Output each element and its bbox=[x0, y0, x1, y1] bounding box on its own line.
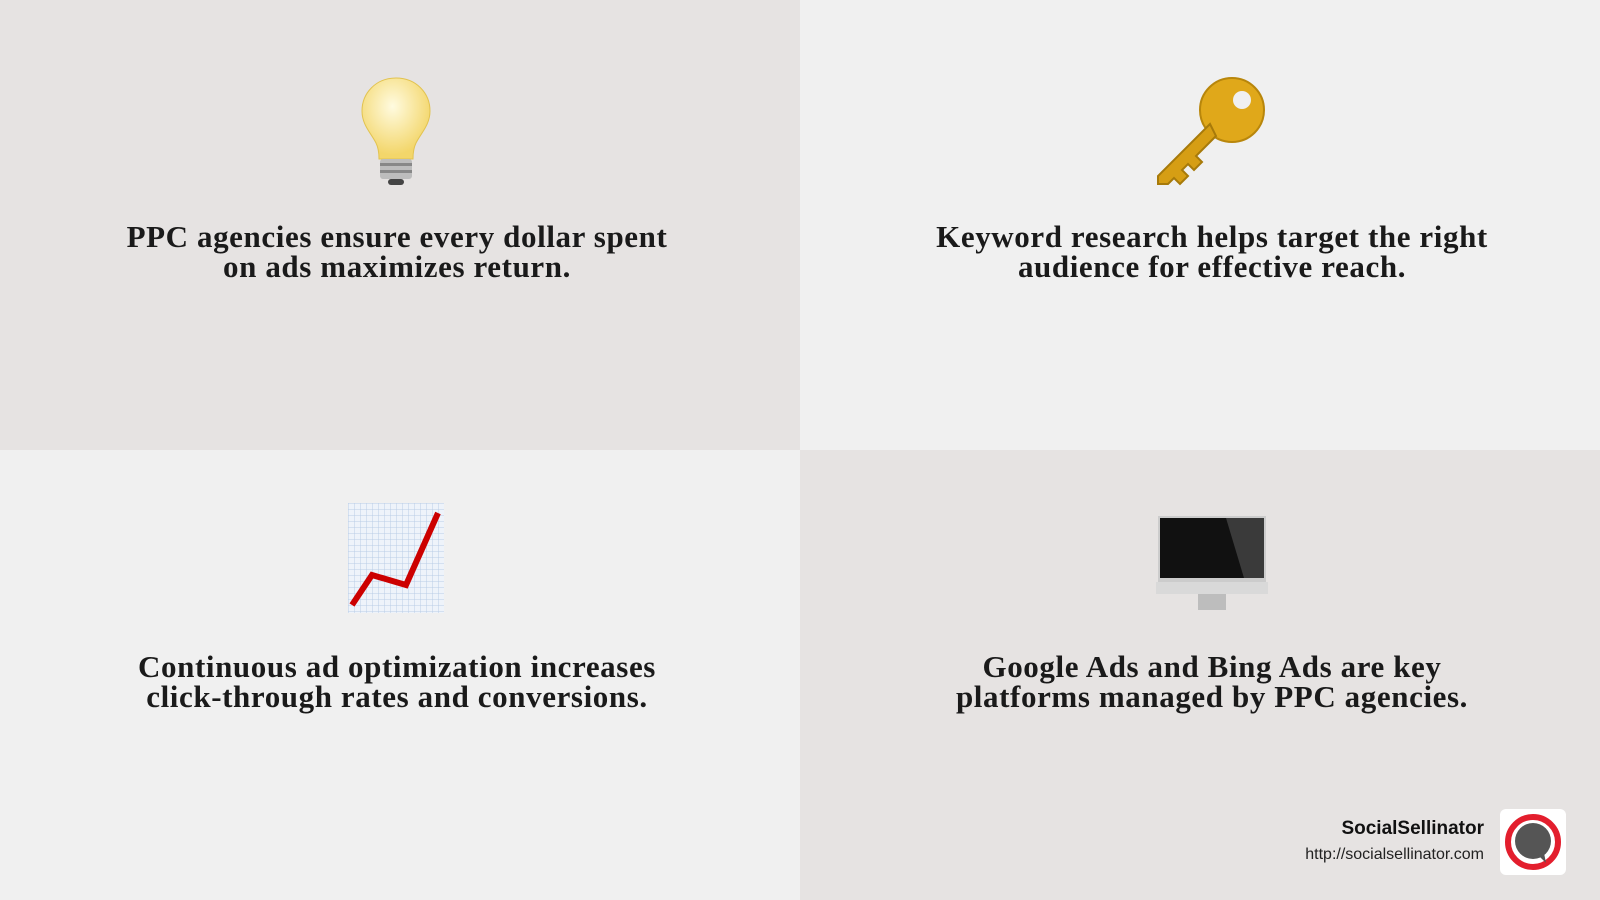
icon: chart bbox=[348, 503, 444, 613]
text: Google Ads bbox=[956, 649, 1468, 714]
text: PPC agencies bbox=[127, 219, 667, 284]
panel: top-right bbox=[800, 0, 1600, 450]
icon: logo bbox=[1500, 809, 1566, 875]
icon: key bbox=[1157, 77, 1265, 186]
brand name: SocialSellinator bbox=[1341, 818, 1484, 839]
text: Keyword research: Keyword research helps target the right bbox=[936, 219, 1488, 254]
panel: bottom-left bbox=[0, 450, 800, 900]
text: Continuous optimization bbox=[138, 649, 656, 714]
text: PPC agencies: PPC agencies ensure every dollar spent bbox=[127, 219, 667, 254]
text: PPC agencies: on ads maximizes return. bbox=[223, 249, 571, 284]
panel: bottom-right bbox=[800, 450, 1600, 900]
brand: SocialSellinator bbox=[1305, 809, 1566, 875]
text: Google Ads: platforms managed by PPC agencies. bbox=[956, 679, 1468, 714]
url: http://socialsellinator.com bbox=[1305, 846, 1484, 863]
panel: top-left bbox=[0, 0, 800, 450]
icon: monitor bbox=[1156, 516, 1268, 610]
text: Keyword research: audience for effective reach. bbox=[1018, 249, 1406, 284]
text: Continuous optimization: click-through rates and conversions. bbox=[146, 679, 648, 714]
text: Keyword research bbox=[936, 219, 1488, 284]
text: Google Ads: Google Ads and Bing Ads are key bbox=[982, 649, 1442, 684]
icon: light bulb bbox=[362, 78, 430, 185]
text: Continuous optimization: Continuous ad optimization increases bbox=[138, 649, 656, 684]
